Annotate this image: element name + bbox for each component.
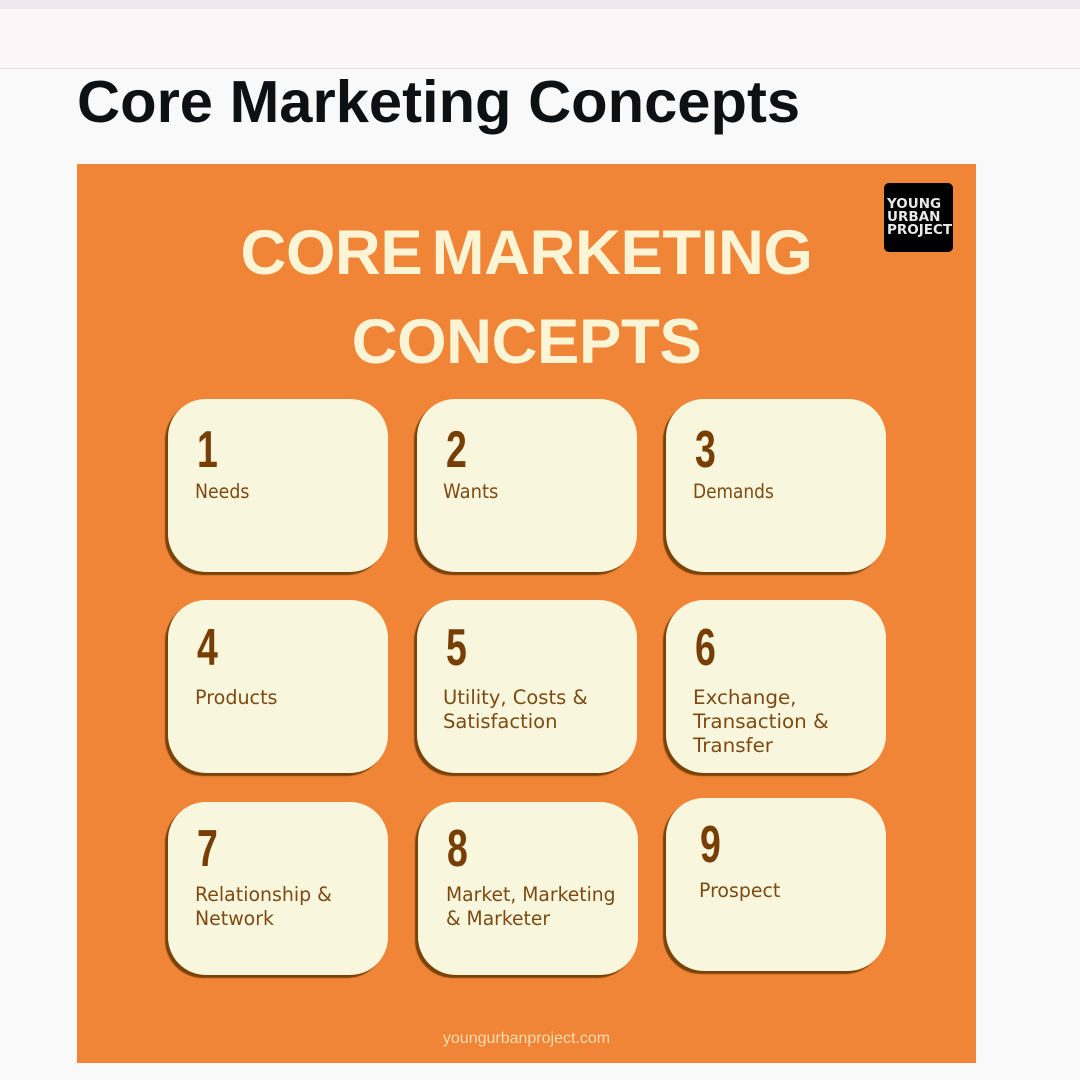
card 2 <box>417 399 637 572</box>
number 1: 1 <box>197 421 218 479</box>
card 9 <box>666 798 886 971</box>
card 6 <box>666 600 886 773</box>
website footer: youngurbanproject.com <box>443 1030 610 1047</box>
card 4 <box>168 600 388 773</box>
number 8: 8 <box>447 820 468 878</box>
label: market, marketing and marketer: & Marketer <box>446 907 550 930</box>
label: wants: Wants <box>443 480 498 503</box>
label: market, marketing and marketer <box>446 883 616 930</box>
page heading: Core Marketing Concepts <box>77 68 800 135</box>
card 8 <box>418 802 638 975</box>
label: exchange, transaction and transfer <box>692 686 829 757</box>
number 4: 4 <box>197 619 218 677</box>
number 5: 5 <box>446 619 467 677</box>
label: exchange, transaction and transfer: Transaction & <box>693 710 829 733</box>
infographic title: CONCEPTS <box>352 307 701 377</box>
infographic title <box>240 218 812 377</box>
header bar <box>0 9 1080 69</box>
logo text: YOUNG <box>887 196 941 212</box>
card 1 <box>168 399 388 572</box>
number 9: 9 <box>700 816 721 874</box>
browser top strip <box>0 0 1080 9</box>
label: relationship and network: Network <box>195 907 274 930</box>
label: market, marketing and marketer: Market, Marketing <box>446 883 616 906</box>
label: needs: Needs <box>195 480 249 503</box>
number 3: 3 <box>695 421 716 479</box>
card 5 <box>417 600 637 773</box>
logo text: PROJECT <box>887 222 952 238</box>
label: relationship and network: Relationship & <box>195 883 332 906</box>
infographic title: CORE MARKETING <box>240 218 812 288</box>
card 3 <box>666 399 886 572</box>
label: prospect: Prospect <box>699 879 780 902</box>
logo text <box>886 196 952 238</box>
label: products: Products <box>195 686 278 709</box>
card 7 <box>168 802 388 975</box>
logo text: URBAN <box>887 209 940 225</box>
label: demands: Demands <box>693 480 774 503</box>
number 6: 6 <box>695 619 716 677</box>
logo badge <box>884 183 953 252</box>
label: utility, costs and satisfaction: Satisfaction <box>443 710 557 733</box>
panel: infographic <box>77 164 976 1063</box>
label: utility, costs and satisfaction <box>443 686 588 733</box>
number 2: 2 <box>446 421 467 479</box>
number 7: 7 <box>197 820 218 878</box>
label: exchange, transaction and transfer: Transfer <box>693 734 773 757</box>
label: exchange, transaction and transfer: Exchange, <box>693 686 797 709</box>
label: relationship and network <box>195 883 332 930</box>
label: utility, costs and satisfaction: Utility, Costs & <box>443 686 588 709</box>
